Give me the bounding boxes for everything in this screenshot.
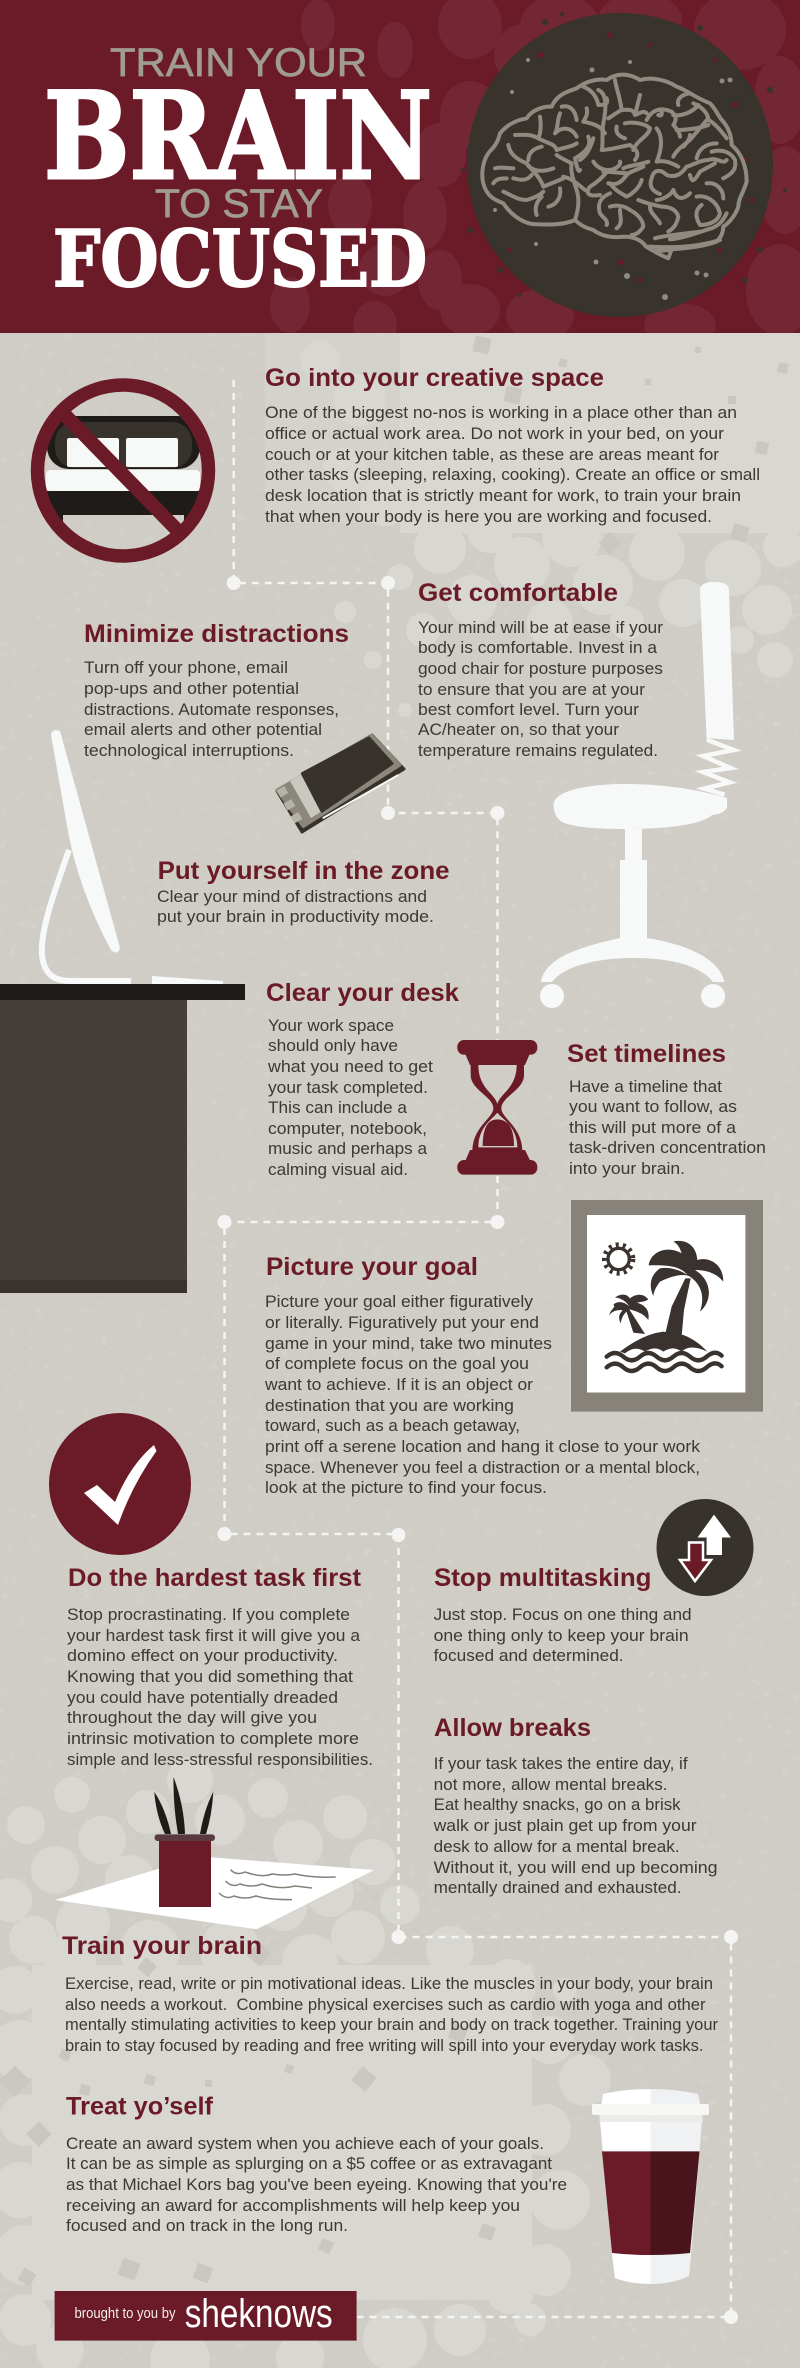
body text: Stop procrastinating. If you complete [67,1605,350,1624]
panel: clear your desk [266,979,459,1179]
body text: space. Whenever you feel a distraction or a mental block, [265,1458,700,1477]
body text: email alerts and other potential [84,720,322,739]
body text [418,618,663,760]
body text: Turn off your phone, email [84,658,288,677]
body text: you could have potentially dreaded [67,1688,338,1707]
body text: If your task takes the entire day, if [434,1754,688,1773]
body text: or literally. Figuratively put your end [265,1313,539,1332]
body text: This can include a [268,1098,408,1117]
icon: no bed [38,385,208,556]
body text [65,1974,718,2055]
brain illustration [482,75,747,258]
title [44,41,432,305]
body text: want to achieve. If it is an object or [264,1375,533,1394]
body text: Knowing that you did something that [67,1667,353,1686]
heading: Stop multitasking [434,1564,652,1592]
body text: your task completed. [268,1078,428,1097]
heading: Treat yo’self [66,2092,214,2120]
body text: temperature remains regulated. [418,741,658,760]
icon: check mark [49,1413,191,1555]
body text [265,403,760,526]
icon: office chair [540,582,734,1008]
body text [569,1077,766,1178]
body text: what you need to get [267,1057,433,1076]
icon: desk [0,984,245,1293]
body text: to ensure that you are at your [418,680,645,699]
body text: also needs a workout. Combine physical exercises such as cardio with yoga and other [65,1995,706,2014]
body text: AC/heater on, so that your [418,720,619,739]
body text: print off a serene location and hang it close to your work [265,1437,701,1456]
body text: office or actual work area. Do not work in your bed, on your [265,424,724,443]
body text: focused and determined. [434,1646,624,1665]
panel: do the hardest task first [67,1564,373,1769]
body text: simple and less-stressful responsibilities. [67,1750,373,1769]
body text: of complete focus on the goal you [265,1354,529,1373]
body text: Clear your mind of distractions and [157,887,427,906]
panel: minimize distractions [84,620,349,760]
icon: pen cup on paper [55,1777,374,1929]
body text: receiving an award for accomplishments will help keep you [66,2196,520,2215]
body text [433,1754,718,1897]
heading: Set timelines [567,1040,726,1068]
icon: coffee cup [592,2089,709,2284]
panel: set timelines [567,1040,766,1178]
title line: to stay: TO STAY [155,182,323,226]
body text: throughout the day will give you [67,1708,317,1727]
title line: focused: FOCUSED [53,214,427,305]
panel: stop multitasking [434,1564,692,1665]
body text: One of the biggest no-nos is working in a place other than an [265,403,737,422]
body text: task-driven concentration [569,1138,766,1157]
body text: intrinsic motivation to complete more [67,1729,359,1748]
icon: multitasking arrows [656,1499,754,1596]
panel: train your brain [62,1932,718,2055]
title line: train your: TRAIN YOUR [110,41,367,85]
icon: smartphone [277,735,404,832]
sheknows logo: sheknows [185,2292,333,2336]
body text: not more, allow mental breaks. [434,1775,668,1794]
body text: Have a timeline that [569,1077,722,1096]
body text [434,1605,692,1665]
body text: game in your mind, take two minutes [265,1334,552,1353]
body text: brain to stay focused by reading and free writing will spill into your everyday work tasks. [65,2036,704,2055]
dotted connector path [218,380,738,2324]
body text: Your work space [268,1016,394,1035]
panel: treat yo'self [66,2092,567,2235]
body text: your hardest task first it will give you a [67,1626,361,1645]
body text: couch or at your kitchen table, as these are areas meant for [265,445,719,464]
body text: mentally stimulating activities to keep your brain and body on track together. Training your [65,2015,718,2034]
title line: brain: BRAIN [44,66,432,207]
heading: Clear your desk [266,979,459,1007]
body text: domino effect on your productivity. [67,1646,338,1665]
heading: Do the hardest task first [68,1564,362,1592]
body text: pop-ups and other potential [84,679,299,698]
icon: framed island picture [571,1200,763,1412]
panel: picture your goal [264,1253,701,1497]
heading: Allow breaks [434,1714,591,1742]
panel: put yourself in the zone [157,857,450,926]
brain spatter circle [461,12,787,317]
body text: good chair for posture purposes [418,659,663,678]
icon: hourglass [457,1040,537,1175]
header banner [0,0,800,349]
body text: Without it, you will end up becoming [434,1858,718,1877]
body text: you want to follow, as [569,1097,737,1116]
body text: toward, such as a beach getaway, [265,1416,520,1435]
body text: computer, notebook, [268,1119,427,1138]
credit text: brought to you by [74,2305,176,2322]
body text: that when your body is here you are working and focused. [265,507,712,526]
body text: Eat healthy snacks, go on a brisk [434,1795,681,1814]
panel: get comfortable [418,579,663,760]
body text: calming visual aid. [268,1160,408,1179]
body text: should only have [268,1036,398,1055]
heading: Put yourself in the zone [158,857,450,885]
body text: destination that you are working [265,1396,514,1415]
body text: best comfort level. Turn your [418,700,639,719]
heading: Minimize distractions [84,620,349,648]
body text: Exercise, read, write or pin motivational ideas. Like the muscles in your body, your brain [65,1974,713,1993]
footer credit box [55,2291,357,2341]
heading: Get comfortable [418,579,618,607]
body text: walk or just plain get up from your [433,1816,697,1835]
body text [67,1605,373,1769]
body text: this will put more of a [569,1118,737,1137]
heading: Train your brain [62,1932,262,1960]
heading: Go into your creative space [265,364,604,392]
body text: technological interruptions. [84,741,294,760]
body text: other tasks (sleeping, relaxing, cooking). Create an office or small [265,465,760,484]
body text: into your brain. [569,1159,685,1178]
body text: music and perhaps a [268,1139,428,1158]
icon: computer monitor [42,730,223,984]
panel: go into your creative space [265,364,760,526]
body text [66,2134,567,2235]
body text: mentally drained and exhausted. [434,1878,682,1897]
heading: Picture your goal [266,1253,478,1281]
panel: allow breaks [433,1714,718,1897]
body text: desk to allow for a mental break. [434,1837,680,1856]
body text [264,1292,701,1497]
body text [157,887,434,926]
body text [267,1016,433,1179]
body text: put your brain in productivity mode. [157,907,434,926]
body text [84,658,339,760]
body text: Create an award system when you achieve each of your goals. [66,2134,544,2153]
body text: Your mind will be at ease if your [418,618,663,637]
body text: Picture your goal either figuratively [265,1292,534,1311]
body text: Just stop. Focus on one thing and [434,1605,692,1624]
body text: as that Michael Kors bag you've been eyeing. Knowing that you're [66,2175,567,2194]
body text: desk location that is strictly meant for work, to train your brain [265,486,741,505]
body text: look at the picture to find your focus. [265,1478,547,1497]
body text: distractions. Automate responses, [84,700,339,719]
body text: focused and on track in the long run. [66,2216,348,2235]
body text: one thing only to keep your brain [434,1626,689,1645]
body text: body is comfortable. Invest in a [418,638,658,657]
body text: It can be as simple as splurging on a $5 coffee or as extravagant [66,2154,552,2173]
